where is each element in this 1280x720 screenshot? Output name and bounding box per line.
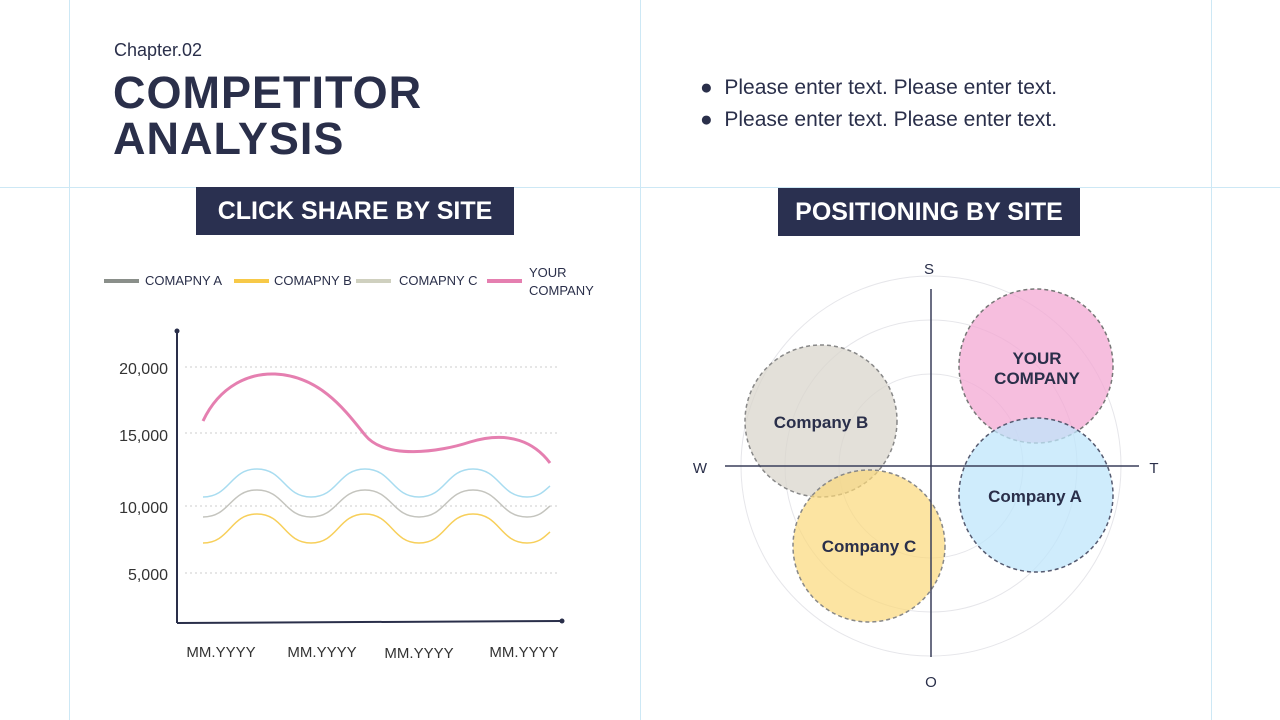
line chart: MM.YYYY: [384, 645, 454, 662]
bullet text: ● Please enter text. Please enter text.: [700, 108, 1057, 131]
legend: YOUR: [529, 265, 567, 280]
positioning chart: Company B: [774, 413, 868, 432]
bullet text: ● Please enter text. Please enter text.: [700, 76, 1057, 99]
legend: COMAPNY A: [145, 273, 222, 288]
header: positioning: POSITIONING BY SITE: [795, 198, 1063, 226]
line chart: MM.YYYY: [489, 644, 559, 661]
line chart: MM.YYYY: [186, 644, 256, 661]
legend: COMAPNY B: [274, 273, 352, 288]
positioning chart: Company A: [988, 487, 1082, 506]
positioning chart: W: [693, 460, 708, 477]
legend: COMAPNY C: [399, 273, 478, 288]
positioning chart: S: [924, 261, 934, 278]
legend: [104, 265, 594, 298]
title: ANALYSIS: [113, 113, 344, 164]
positioning chart: Company C: [822, 537, 916, 556]
positioning chart: T: [1149, 460, 1159, 477]
chapter label: Chapter.02: [114, 40, 202, 60]
line chart: MM.YYYY: [287, 644, 357, 661]
header: click share: CLICK SHARE BY SITE: [218, 197, 492, 225]
header: positioning: [778, 188, 1080, 236]
title: COMPETITOR: [113, 67, 422, 118]
line chart: 15,000: [119, 428, 168, 445]
title: [113, 67, 422, 164]
line chart: 5,000: [128, 567, 168, 584]
legend: COMPANY: [529, 283, 594, 298]
positioning chart: O: [925, 674, 937, 691]
line chart: 10,000: [119, 500, 168, 517]
line chart: [119, 328, 564, 662]
bullet text: [700, 76, 1057, 131]
line chart: 20,000: [119, 361, 168, 378]
positioning chart: YOUR: [1012, 349, 1062, 368]
header: click share: [196, 187, 514, 235]
positioning chart: [693, 261, 1159, 691]
positioning chart: COMPANY: [994, 369, 1080, 388]
